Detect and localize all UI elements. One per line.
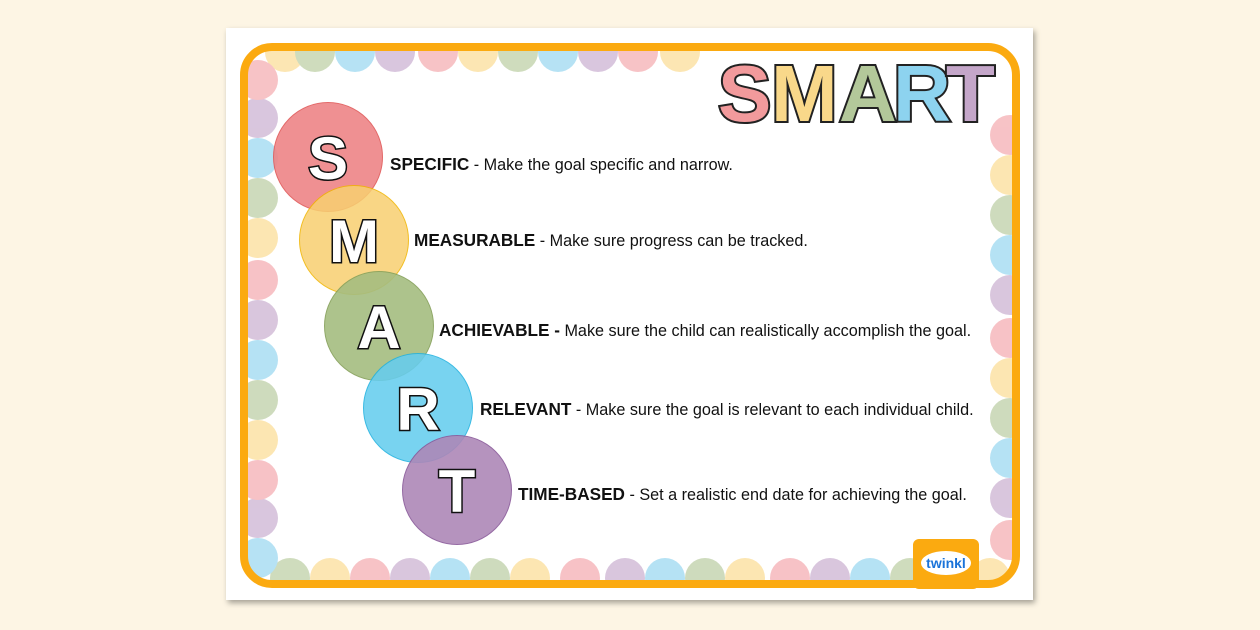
orange frame (244, 47, 1016, 584)
row achievable: ACHIEVABLE - Make sure the child can realistically accomplish the goal. (439, 320, 971, 340)
circle A: A (357, 294, 401, 361)
twinkl logo: twinkl (926, 555, 966, 571)
decorative circle border (238, 32, 1030, 598)
circle R: R (396, 376, 440, 443)
circle T (403, 436, 511, 544)
text rows (390, 154, 974, 504)
title: SMART: A (839, 49, 897, 138)
circle S (274, 103, 382, 211)
row relevant: RELEVANT - Make sure the goal is relevant to each individual child. (480, 399, 974, 419)
card (226, 28, 1033, 600)
row specific: SPECIFIC - Make the goal specific and narrow. (390, 154, 733, 174)
title: SMART: S (718, 49, 771, 138)
twinkl logo (913, 539, 979, 589)
letter circles (274, 103, 511, 544)
row measurable: MEASURABLE - Make sure progress can be tracked. (414, 230, 808, 250)
title: SMART: R (893, 49, 951, 138)
title: SMART: M (771, 49, 838, 138)
title: SMART: T (946, 49, 995, 138)
circle A (325, 272, 433, 380)
circle T: T (439, 458, 475, 525)
circle M (300, 186, 408, 294)
row time-based: TIME-BASED - Set a realistic end date for achieving the goal. (518, 484, 967, 504)
circle M: M (329, 208, 379, 275)
circle S: S (308, 125, 348, 192)
title: SMART (718, 49, 995, 138)
circle R (364, 354, 472, 462)
